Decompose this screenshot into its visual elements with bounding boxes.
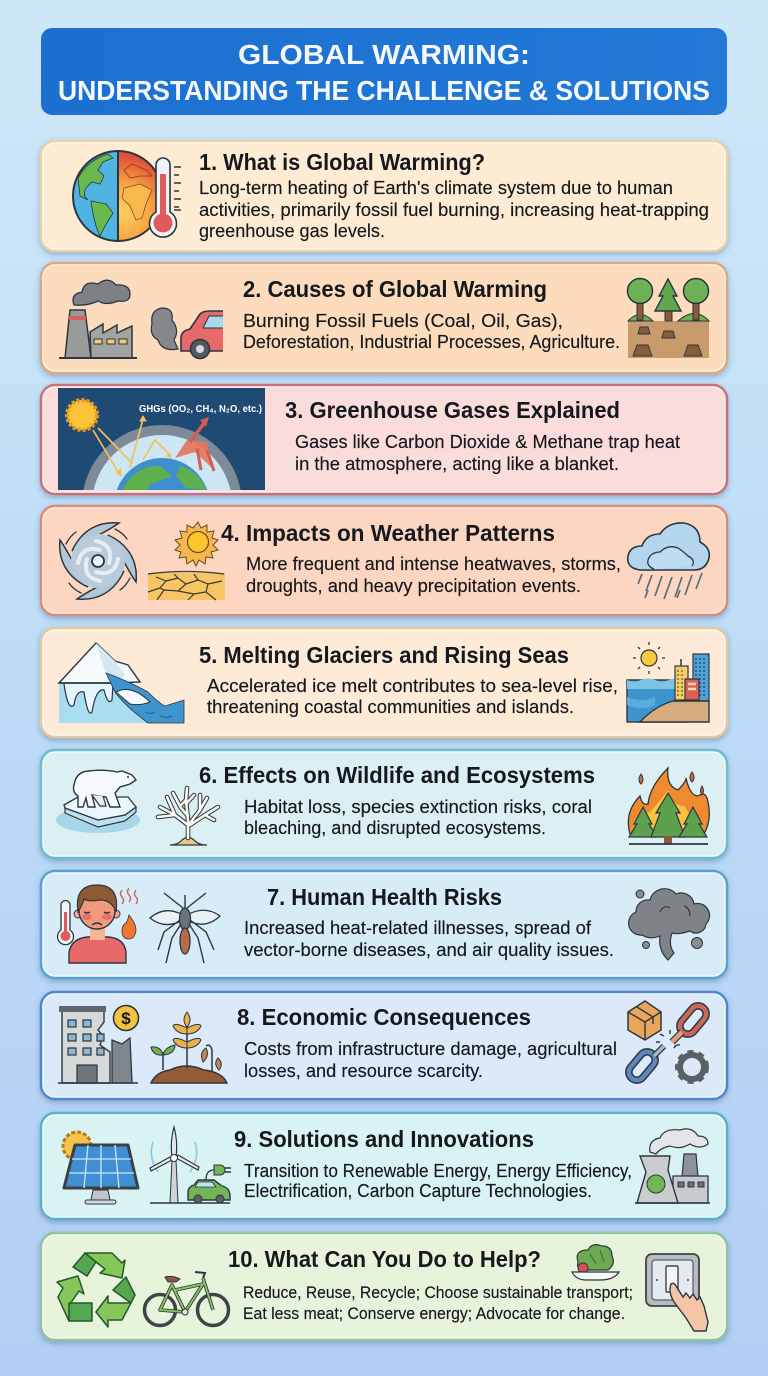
body text [244, 1039, 617, 1081]
body text [244, 918, 614, 960]
body text: Habitat loss, species extinction risks, coral [244, 797, 592, 817]
icon: melting iceberg [59, 643, 184, 723]
body text: Long-term heating of Earth's climate system due to human [199, 178, 673, 198]
panel 10: what you can do [41, 1233, 727, 1340]
body text [207, 676, 618, 717]
body text [199, 178, 709, 241]
body text: droughts, and heavy precipitation events. [246, 576, 581, 596]
icon: forest fire [628, 768, 709, 844]
body text: losses, and resource scarcity. [244, 1061, 483, 1081]
icon: salad plate [572, 1245, 619, 1280]
diagram label: GHGs (OO₂, CH₄, N₂O, etc.) [139, 403, 262, 415]
panel 5: glaciers and seas [41, 628, 727, 737]
body text: Costs from infrastructure damage, agricultural [244, 1039, 617, 1059]
icon: thermometer [150, 158, 181, 237]
heading: 8. Economic Consequences [237, 1004, 531, 1030]
heading: 7. Human Health Risks [267, 884, 502, 910]
body text: More frequent and intense heatwaves, storms, [246, 554, 621, 574]
icon: rain cloud [628, 523, 709, 599]
body text: Burning Fossil Fuels (Coal, Oil, Gas), [243, 311, 563, 331]
body text: vector-borne diseases, and air quality issues. [244, 940, 614, 960]
icon: person with heat stress [58, 885, 138, 963]
icon: damaged building and cost [58, 1006, 138, 1083]
body text [243, 1283, 633, 1323]
body text: Gases like Carbon Dioxide & Methane trap heat [295, 432, 680, 452]
body text: bleaching, and disrupted ecosystems. [244, 818, 546, 838]
body text [244, 1161, 632, 1201]
body text [244, 797, 592, 838]
body text: threatening coastal communities and islands. [207, 697, 574, 717]
body text: Accelerated ice melt contributes to sea-level rise, [207, 676, 618, 696]
icon: damaged building and cost: $ [121, 1009, 131, 1028]
panel 3: greenhouse gases [36, 383, 732, 501]
panel 2: causes [41, 263, 727, 373]
icon: bleached coral [158, 788, 218, 845]
greenhouse effect diagram [58, 388, 265, 490]
icon: crops and soil [151, 1012, 227, 1083]
icon: hurricane [60, 523, 136, 599]
heading: 1. What is Global Warming? [199, 149, 485, 175]
icon: car with exhaust [150, 307, 223, 360]
title text: GLOBAL WARMING: [238, 39, 530, 70]
title banner [41, 28, 727, 115]
icon: coastal city and rising sea [627, 642, 709, 722]
icon: bicycle [144, 1272, 228, 1326]
icon: half-cool half-hot earth [73, 151, 163, 241]
body text: Electrification, Carbon Capture Technologies. [244, 1181, 592, 1201]
icon: sun [175, 522, 218, 566]
body text [246, 554, 621, 596]
icon: supply chain break [626, 1001, 709, 1083]
icon: factory with smoke [59, 280, 137, 358]
icon: mosquito [150, 893, 220, 963]
body text: Increased heat-related illnesses, spread of [244, 918, 592, 938]
heading: 10. What Can You Do to Help? [228, 1246, 541, 1272]
body text: greenhouse gas levels. [199, 221, 385, 241]
icon: polar bear on ice floe [56, 770, 140, 833]
body text: Transition to Renewable Energy, Energy Efficiency, [244, 1161, 632, 1181]
icon: recycling arrows [57, 1253, 135, 1327]
panel 8: economic [41, 992, 727, 1099]
icon: light switch with hand [646, 1254, 708, 1331]
body text: Eat less meat; Conserve energy; Advocate for change. [243, 1304, 625, 1323]
body text: Deforestation, Industrial Processes, Agriculture. [243, 332, 620, 352]
body text: activities, primarily fossil fuel burning, increasing heat-trapping [199, 200, 709, 220]
icon: cracked drought ground [148, 572, 225, 600]
heading: 9. Solutions and Innovations [234, 1126, 534, 1152]
body text [295, 432, 680, 474]
panel 7: health [41, 871, 727, 978]
icon: deforestation [628, 278, 709, 358]
heading: 3. Greenhouse Gases Explained [285, 397, 620, 423]
heading: 4. Impacts on Weather Patterns [221, 520, 555, 546]
heading: 5. Melting Glaciers and Rising Seas [199, 642, 569, 668]
panel 6: wildlife [41, 750, 727, 858]
icon: solar panel [63, 1132, 138, 1204]
icon: power plant with carbon capture [635, 1129, 710, 1203]
heading: 6. Effects on Wildlife and Ecosystems [199, 762, 595, 788]
body text: Reduce, Reuse, Recycle; Choose sustainable transport; [243, 1283, 633, 1302]
body text [243, 311, 620, 352]
panel 4: weather [41, 506, 727, 615]
body text: in the atmosphere, acting like a blanket. [295, 454, 619, 474]
title text [58, 39, 710, 106]
icon: polluted smog [629, 889, 710, 960]
panel 9: solutions [41, 1113, 727, 1219]
title text: UNDERSTANDING THE CHALLENGE & SOLUTIONS [58, 75, 710, 106]
heading: 2. Causes of Global Warming [243, 276, 547, 302]
icon: wind turbine and electric car [150, 1127, 231, 1203]
panel 1: what is global warming [41, 141, 727, 251]
